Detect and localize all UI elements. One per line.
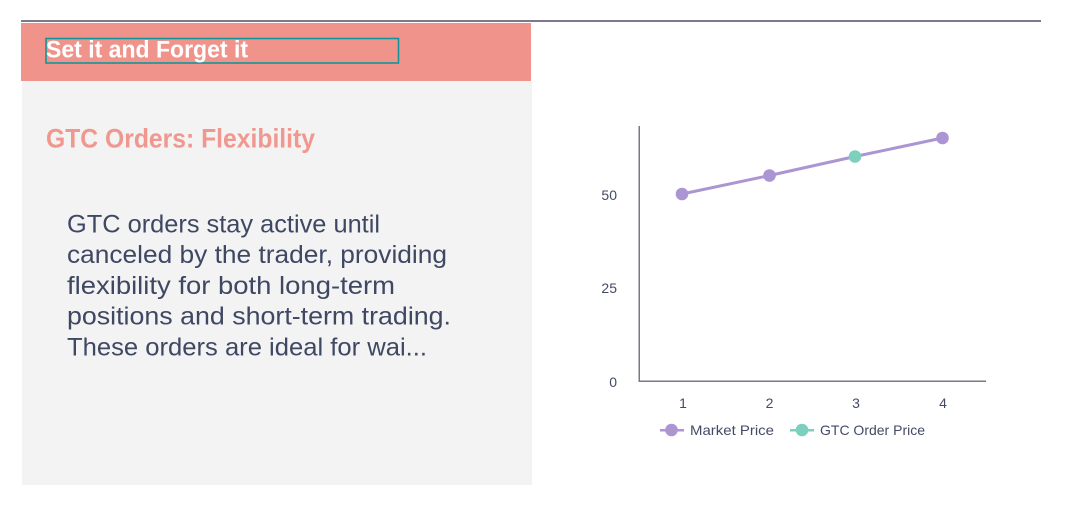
header title bbox=[46, 36, 398, 64]
body text: GTC orders stay active until bbox=[67, 210, 380, 238]
y axis: 25 bbox=[601, 280, 617, 296]
x axis: 4 bbox=[939, 395, 947, 411]
panel heading: GTC Orders: Flexibility bbox=[46, 124, 315, 154]
title text: Set it and Forget it bbox=[46, 36, 248, 64]
legend: market price bbox=[660, 422, 774, 438]
panel: content bbox=[21, 23, 532, 485]
header band bbox=[21, 23, 531, 81]
x axis: 3 bbox=[852, 395, 860, 411]
x axis bbox=[640, 380, 986, 411]
series: market price bbox=[676, 132, 949, 200]
body text: These orders are ideal for wai... bbox=[67, 334, 427, 362]
body text: flexibility for both long-term bbox=[67, 272, 395, 300]
x axis: 2 bbox=[766, 395, 774, 411]
legend: GTC order price: GTC Order Price bbox=[820, 422, 925, 438]
line chart bbox=[601, 126, 986, 438]
x axis: 1 bbox=[679, 395, 687, 411]
top rule bbox=[21, 20, 1041, 22]
series: GTC order price bbox=[849, 150, 861, 163]
y axis: 0 bbox=[609, 374, 617, 390]
y axis bbox=[601, 126, 640, 390]
panel background bbox=[22, 81, 532, 485]
legend: market price: Market Price bbox=[690, 422, 774, 438]
body text: canceled by the trader, providing bbox=[67, 241, 447, 269]
y axis: 50 bbox=[601, 187, 617, 203]
legend bbox=[660, 422, 925, 438]
body text: positions and short-term trading. bbox=[67, 302, 451, 330]
body text bbox=[67, 210, 451, 362]
title focus box bbox=[46, 38, 398, 63]
